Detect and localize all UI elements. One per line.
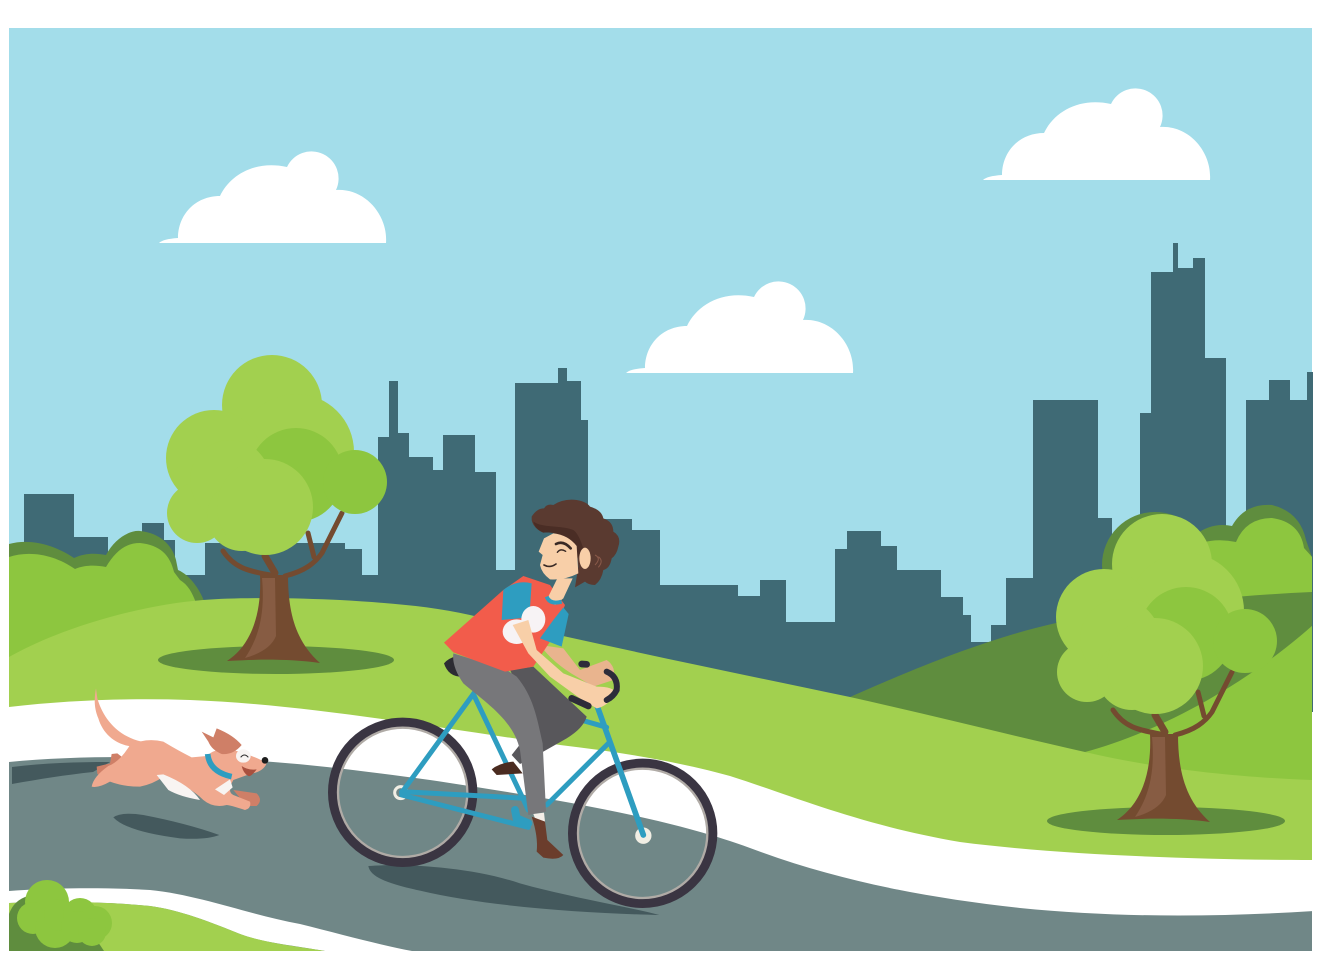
lower white path [9,888,412,951]
collar [547,597,562,603]
asphalt road [9,757,1313,951]
far shoe [492,762,523,775]
near boot [532,817,563,859]
seat [444,657,462,677]
ear [579,548,591,569]
sock [533,813,545,822]
rear wheel [333,722,473,862]
bushes: right background [1195,505,1313,600]
cyclist and bicycle [333,500,713,915]
dog far hind leg [96,753,122,774]
dog shadow [113,814,219,839]
left tree trunk [227,575,320,663]
lower left grass [9,902,325,951]
near sleeve [502,582,532,620]
tree shadow: right [1047,807,1285,835]
dog mouth [242,766,257,776]
torso shirt [444,576,565,672]
dog belly [157,774,200,800]
bushes: left background [9,531,204,665]
rear hub [395,787,407,799]
cloud: centre [626,281,853,373]
front hub [637,829,650,842]
dog eye [241,755,248,757]
dog collar [208,754,232,777]
bicycle frame [402,677,643,835]
tree crown [1056,514,1277,714]
tree crown backing [1102,512,1175,570]
clouds [159,88,1210,373]
face [539,533,578,580]
dog far front leg [233,790,260,806]
dog chest [215,779,233,795]
tree trunk [1117,734,1210,822]
bush: foreground lower left [9,880,112,951]
left tree branches [223,513,342,576]
tree: right [1056,512,1277,822]
left trunk highlight [245,578,276,658]
dog ear [202,728,242,754]
tree branches [1113,672,1232,735]
dog body [92,740,267,810]
dog [92,688,268,839]
hair [532,500,619,587]
near leg [453,653,546,815]
dog tail [95,688,142,747]
front wheel [573,763,713,903]
tree: left [166,355,387,663]
trunk highlight [1135,737,1166,817]
shirt heart [503,606,545,644]
left tree crown [166,355,387,555]
white footpath [9,699,1313,925]
near arm [513,620,617,708]
dog nose [262,757,268,764]
hair curl lines [595,555,601,567]
city skyline [24,243,1313,712]
hair dark front band [533,522,583,558]
facial features [544,543,571,566]
cloud: right [983,88,1210,180]
far arm [540,645,614,687]
right grass slope [1085,625,1313,780]
dog eye patch [236,749,251,763]
tree shadow: left [158,646,394,674]
handlebar [572,664,617,706]
road edge shadow [12,762,110,784]
cloud: left [159,151,386,243]
neck [548,578,573,605]
far leg [510,667,587,764]
far dark hill [850,592,1312,752]
main grass field [9,598,1312,860]
bicycle shadow [368,865,659,915]
far sleeve [540,607,569,647]
